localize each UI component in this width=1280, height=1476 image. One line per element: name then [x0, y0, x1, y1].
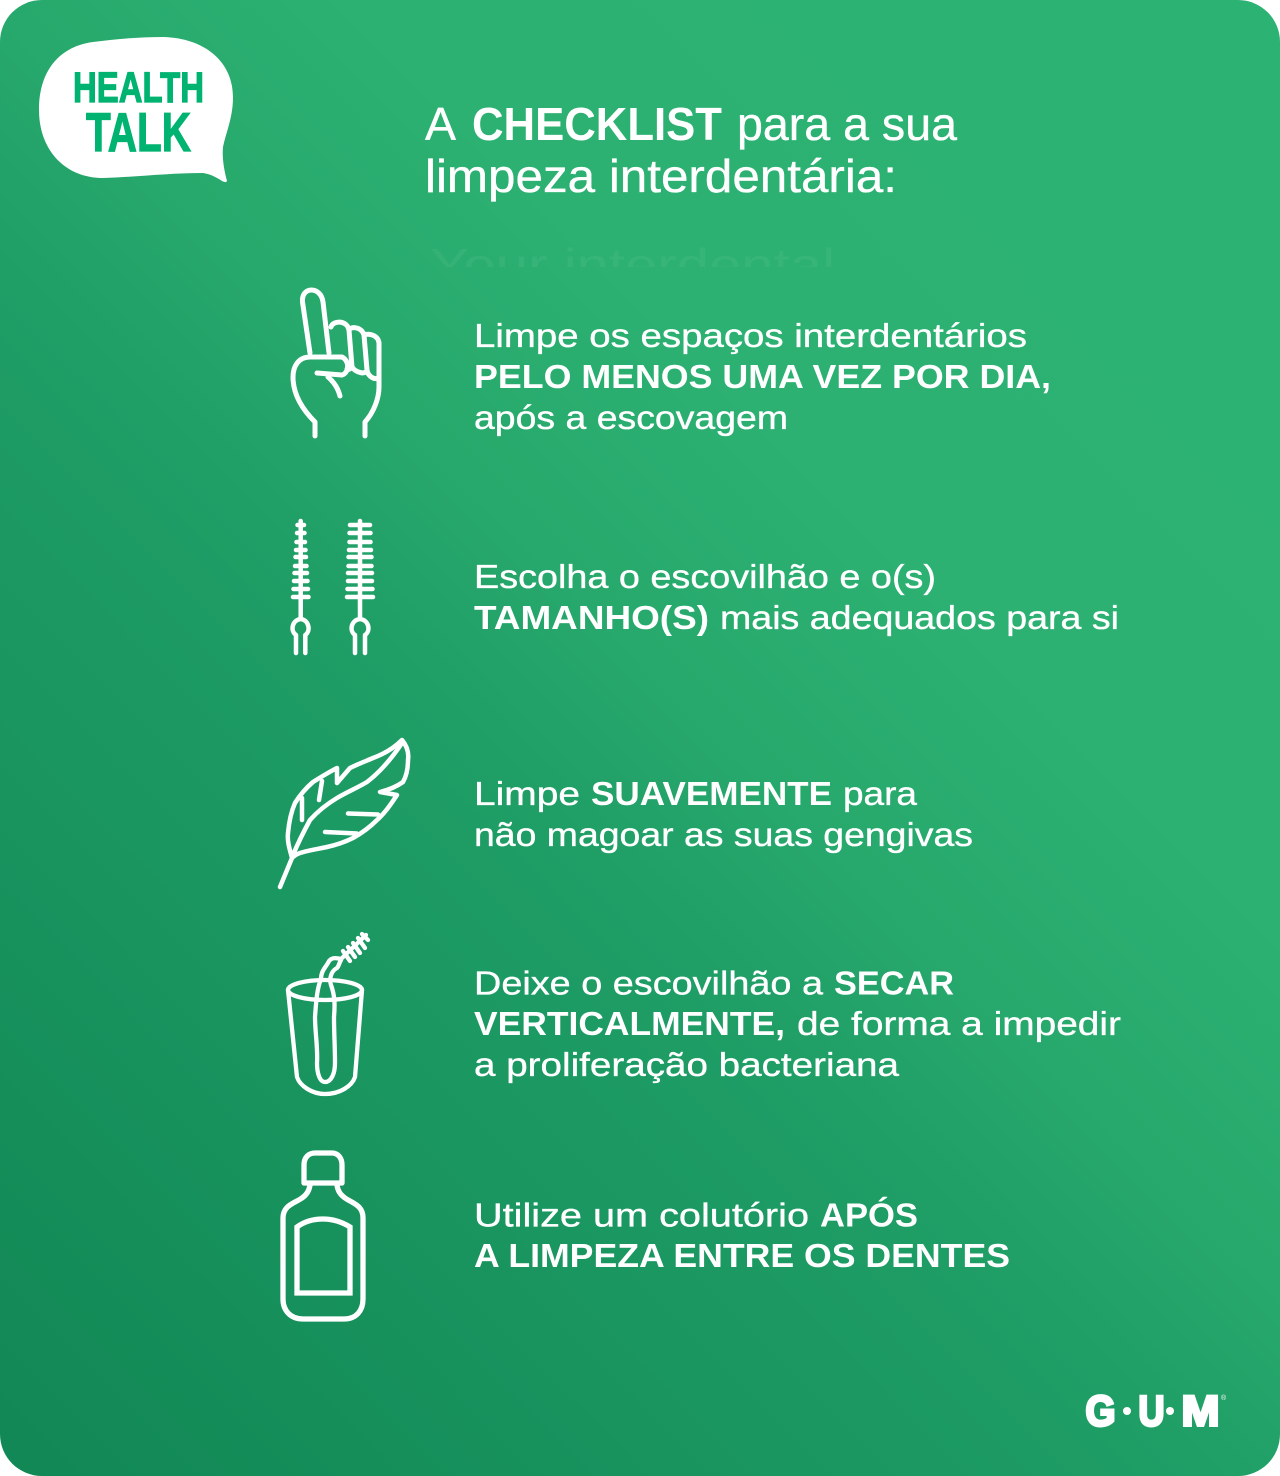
- logo: Health Talk speech bubble: HEALTH: [73, 64, 204, 112]
- text: step 2: Escolha o escovilhão e o(s): [474, 558, 936, 595]
- icon: feather: [280, 740, 408, 887]
- text: step 3: Limpe: [474, 775, 580, 812]
- icon: pointing hand: [293, 290, 379, 436]
- icon: brush in a glass: [288, 934, 368, 1094]
- text: step 2: mais adequados para si: [720, 599, 1119, 636]
- text: step 4: a proliferação bacteriana: [474, 1046, 900, 1083]
- icon: interdental brushes: [293, 521, 373, 653]
- text: step 3: [474, 775, 973, 853]
- logo: GUM: G: [1086, 1388, 1116, 1436]
- text: step 5: Utilize um colutório: [474, 1196, 809, 1234]
- text: step 5: A LIMPEZA ENTRE OS DENTES: [474, 1237, 1010, 1274]
- text: step 2: [474, 558, 1119, 636]
- text: step 4: Deixe o escovilhão a: [474, 964, 824, 1002]
- faint ghost text: Your interdental: [430, 239, 835, 291]
- text: step 4: VERTICALMENTE,: [474, 1005, 785, 1042]
- text: step 3: não magoar as suas gengivas: [474, 816, 973, 853]
- icon: mouthwash bottle: [283, 1153, 363, 1319]
- logo: GUM: ®: [1221, 1394, 1227, 1402]
- text: step 2: TAMANHO(S): [474, 599, 709, 636]
- text: step 3: para: [843, 775, 918, 812]
- title: CHECKLIST: [472, 98, 722, 150]
- logo: GUM: M: [1182, 1388, 1220, 1436]
- text: step 4: de forma a impedir: [797, 1005, 1121, 1042]
- text: step 5: [474, 1196, 1010, 1274]
- title: A: [425, 98, 456, 150]
- title: para a sua: [737, 98, 957, 150]
- text: step 4: [474, 964, 1121, 1083]
- text: step 3: SUAVEMENTE: [591, 775, 832, 812]
- title: limpeza interdentária:: [425, 150, 897, 202]
- text: step 1: PELO MENOS UMA VEZ POR DIA,: [474, 358, 1051, 395]
- logo: Health Talk speech bubble: TALK: [86, 101, 191, 163]
- text: step 1: Limpe os espaços interdentários: [474, 317, 1027, 354]
- title: [425, 98, 957, 202]
- logo: GUM: [1086, 1388, 1227, 1436]
- text: step 4: SECAR: [834, 964, 954, 1002]
- logo: Health Talk speech bubble: [39, 37, 233, 182]
- logo: GUM: U: [1138, 1388, 1164, 1436]
- text: step 1: [474, 317, 1051, 436]
- text: step 5: APÓS: [820, 1196, 918, 1234]
- text: step 1: após a escovagem: [474, 399, 788, 436]
